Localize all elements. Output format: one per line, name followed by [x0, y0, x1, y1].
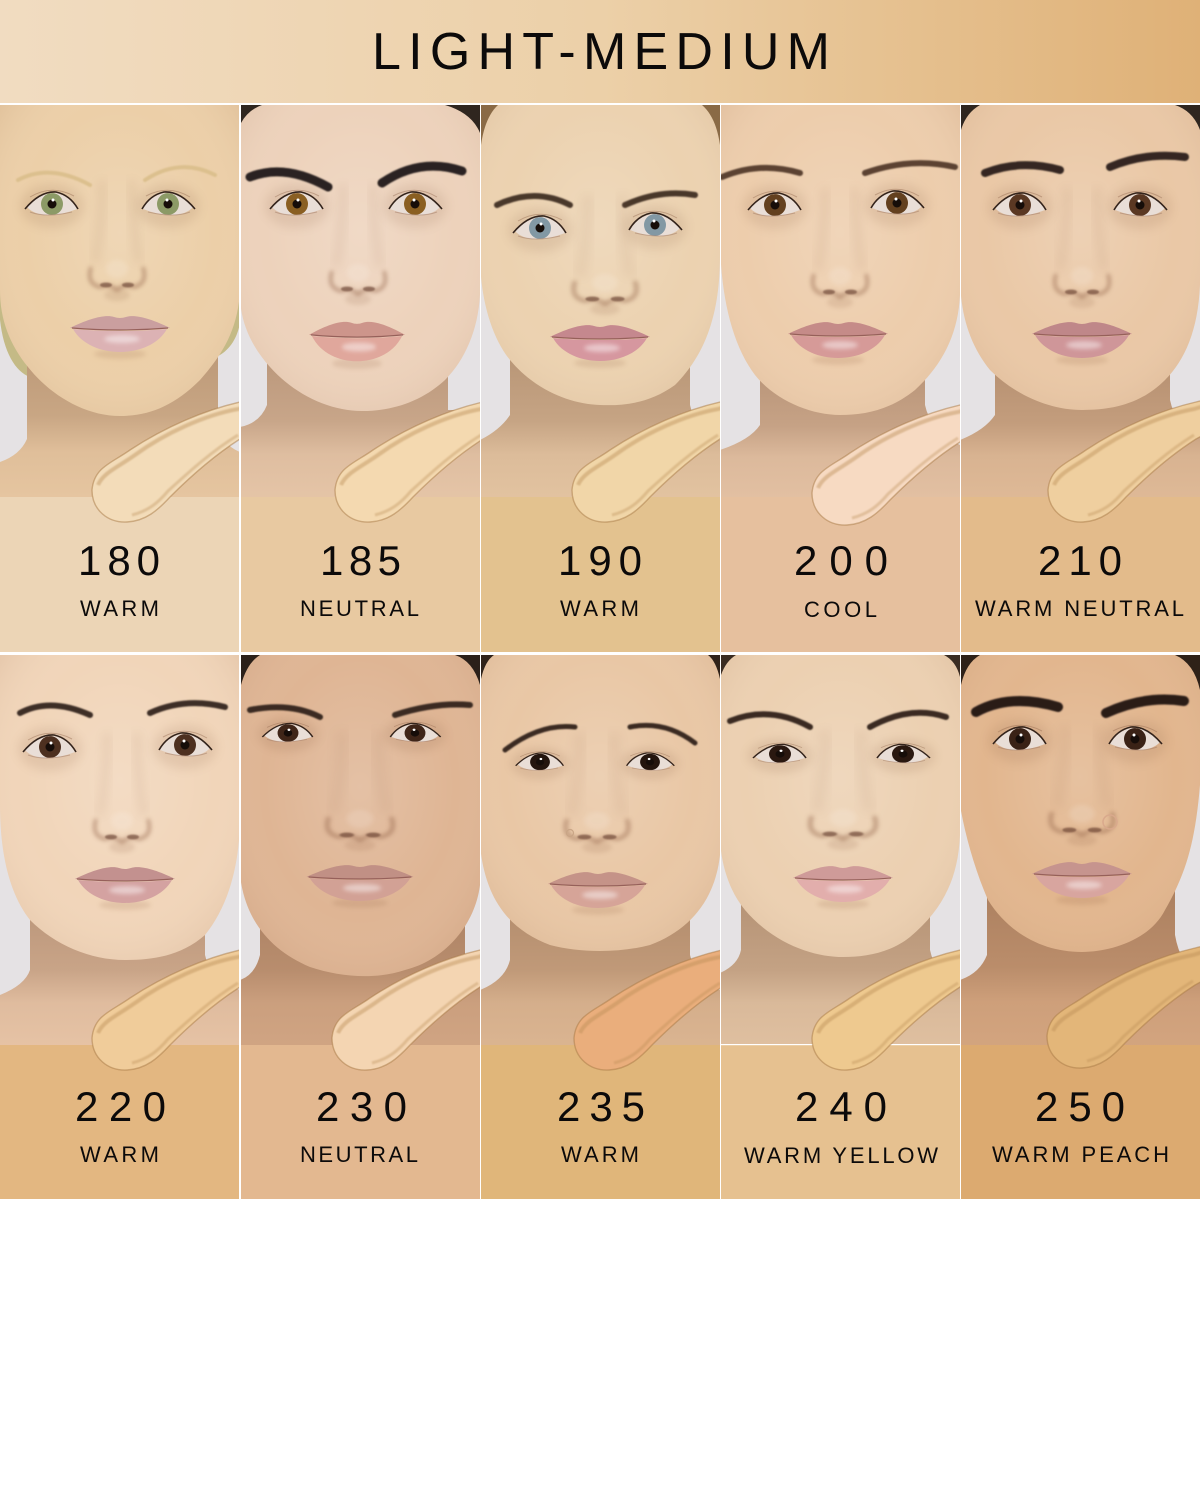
- card: shade 235 warm: [481, 655, 720, 1199]
- card: shade 180 warm: 180: [78, 537, 160, 584]
- card: shade 250 warm peach: 250: [1035, 1083, 1125, 1130]
- card: shade 185 neutral: NEUTRAL: [300, 596, 419, 621]
- header band: LIGHT-MEDIUM: [0, 0, 1200, 103]
- card: shade 200 cool: COOL: [804, 597, 877, 622]
- card: shade 230 neutral: [241, 655, 480, 1199]
- card: shade 220 warm: [0, 655, 239, 1199]
- card: shade 210 warm neutral: [961, 105, 1200, 652]
- card: shade 190 warm: WARM: [560, 596, 639, 621]
- card: shade 185 neutral: 185: [320, 537, 401, 584]
- card: shade 180 warm: [0, 105, 239, 652]
- card: shade 230 neutral: NEUTRAL: [300, 1142, 418, 1167]
- card: shade 250 warm peach: [961, 655, 1200, 1199]
- card: shade 190 warm: 190: [558, 537, 642, 584]
- card: shade 210 warm neutral: 210: [1038, 537, 1122, 584]
- card: shade 185 neutral: [241, 105, 480, 652]
- card: shade 240 warm yellow: 240: [795, 1083, 887, 1130]
- card: shade 210 warm neutral: WARM NEUTRAL: [975, 596, 1184, 621]
- card: shade 200 cool: 200: [794, 537, 888, 584]
- card: shade 220 warm: WARM: [80, 1142, 159, 1167]
- card: shade 235 warm: 235: [557, 1083, 645, 1130]
- card: shade 200 cool: [721, 105, 960, 652]
- title: LIGHT-MEDIUM: [372, 23, 830, 81]
- card: shade 180 warm: WARM: [80, 596, 159, 621]
- card: shade 230 neutral: 230: [316, 1083, 407, 1130]
- card: shade 190 warm: [481, 105, 720, 652]
- card: shade 250 warm peach: WARM PEACH: [992, 1142, 1169, 1167]
- card: shade 240 warm yellow: WARM YELLOW: [744, 1143, 938, 1168]
- card: shade 235 warm: WARM: [561, 1142, 639, 1167]
- card: shade 240 warm yellow: [721, 655, 960, 1199]
- card: shade 220 warm: 220: [75, 1083, 166, 1130]
